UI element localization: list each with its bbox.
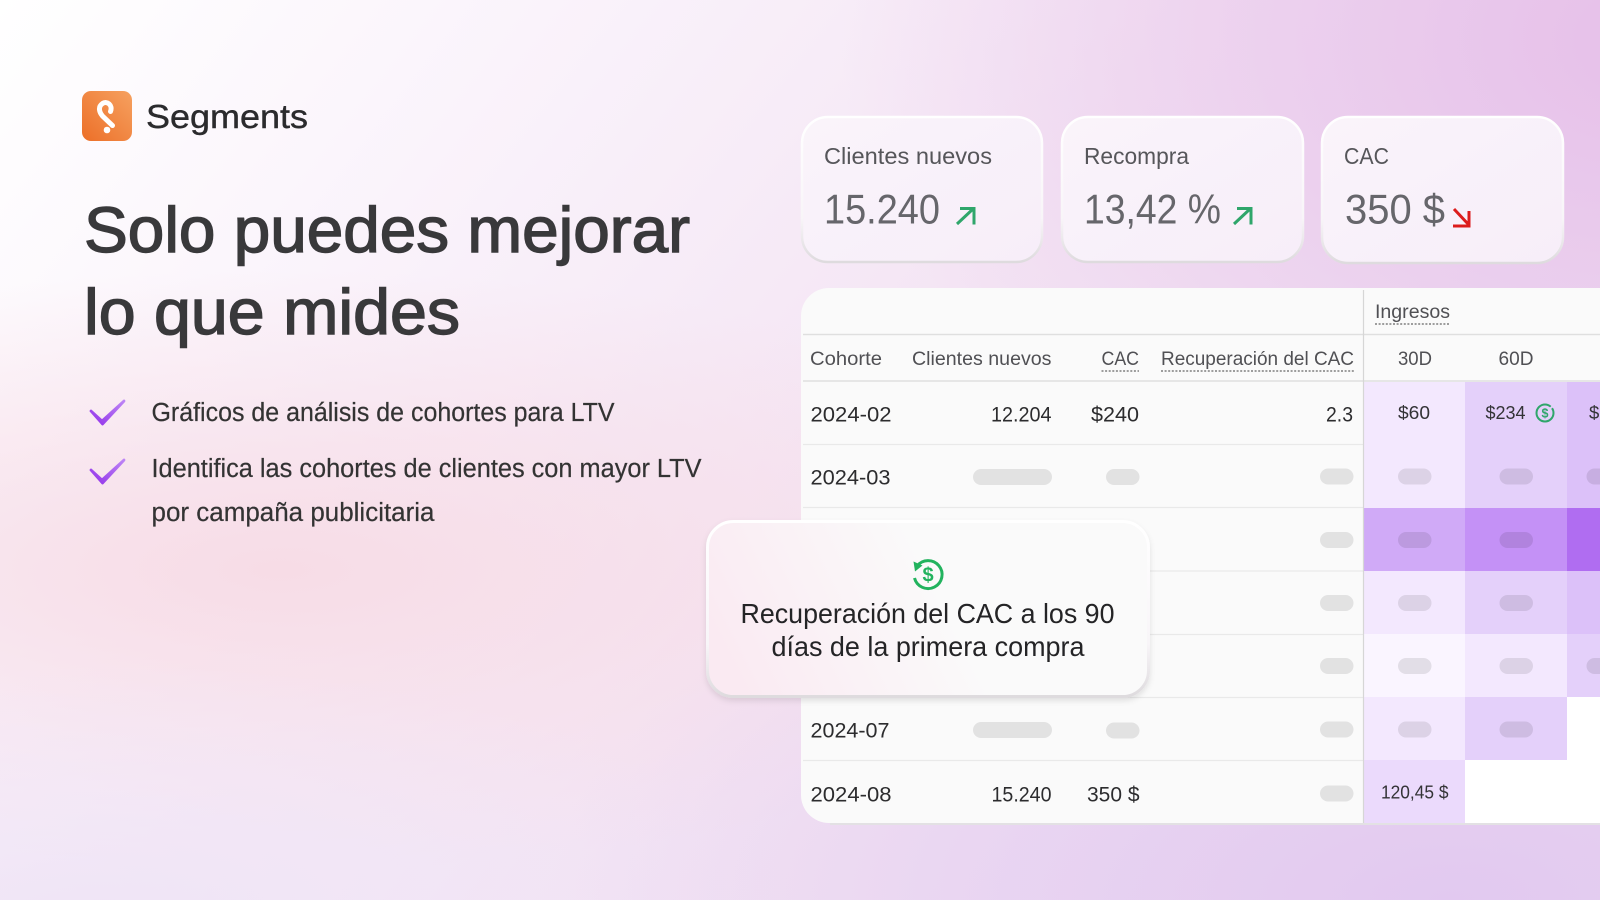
callout — [708, 522, 1148, 696]
title: Solo puedes mejorar — [84, 194, 690, 266]
table row labels and values — [810, 404, 1353, 806]
panel: KPI card clientes nuevos — [802, 117, 1042, 262]
heatmap cell values: 120,45 $ — [1381, 782, 1448, 802]
bullet list — [91, 399, 702, 527]
callout text — [740, 598, 1114, 662]
title: lo que mides — [84, 276, 460, 348]
icon: green up arrow — [957, 208, 974, 224]
heatmap cells — [1364, 382, 1600, 823]
panel: KPI card recompra — [1062, 117, 1303, 262]
table header: CAC — [1102, 349, 1139, 370]
table row labels and values: 2024-08 — [810, 784, 892, 806]
panel: KPI card recompra: Recompra — [1084, 143, 1189, 169]
panel: KPI card clientes nuevos: Clientes nuevos — [824, 143, 992, 169]
heatmap cell values — [1381, 402, 1599, 802]
table row labels and values: 2.3 — [1326, 404, 1353, 426]
icon: recovered dollar badge: $ — [1542, 406, 1549, 420]
table header: Ingresos — [1375, 302, 1450, 323]
table row labels and values: 15.240 — [992, 784, 1052, 806]
panel: KPI card recompra: 13,42 % — [1084, 186, 1221, 232]
table row labels and values: $240 — [1091, 404, 1139, 426]
heatmap cell values: $ — [1589, 402, 1599, 423]
table row labels and values: 2024-07 — [810, 720, 890, 742]
bullet 2: por campaña publicitaria — [152, 499, 435, 527]
table row labels and values: 2024-02 — [810, 404, 892, 426]
table row labels and values: 12.204 — [991, 404, 1052, 426]
panel: KPI card clientes nuevos: 15.240 — [824, 186, 940, 232]
heatmap cell values: $234 — [1486, 402, 1526, 423]
callout text: Recuperación del CAC a los 90 — [740, 598, 1114, 629]
table header: Clientes nuevos — [912, 349, 1052, 370]
panel: KPI card CAC: 350 $ — [1345, 186, 1445, 232]
table grid lines — [803, 290, 1600, 823]
panel: KPI card CAC — [1322, 117, 1563, 263]
title — [84, 194, 690, 348]
table header — [810, 302, 1534, 371]
icon: green dollar refresh: $ — [922, 564, 934, 586]
icon: green dollar refresh — [914, 561, 942, 589]
bullet 2 — [91, 455, 702, 527]
icon: recovered dollar badge — [1536, 404, 1554, 422]
table row labels and values: 2024-03 — [810, 466, 890, 490]
panel: KPI card CAC: CAC — [1344, 143, 1389, 169]
table header: Cohorte — [810, 349, 882, 370]
logo: Segments — [82, 91, 308, 141]
brand name: Segments — [146, 98, 308, 135]
bullet 1: Gráficos de análisis de cohortes para LTV — [152, 399, 614, 427]
table header: 60D — [1498, 349, 1534, 370]
skeleton placeholders — [973, 468, 1600, 802]
table header: Recuperación del CAC — [1161, 349, 1354, 370]
table row labels and values: 350 $ — [1087, 784, 1140, 806]
table header: 30D — [1398, 349, 1432, 370]
heatmap cell values: $60 — [1398, 402, 1430, 423]
icon: orange logo mark — [82, 91, 132, 141]
bullet 2: Identifica las cohortes de clientes con mayor LTV — [152, 455, 702, 483]
icon: green up arrow — [1234, 208, 1251, 224]
panel: cohort table — [801, 288, 1600, 824]
icon: red down arrow — [1453, 209, 1469, 226]
callout text: días de la primera compra — [772, 631, 1085, 662]
